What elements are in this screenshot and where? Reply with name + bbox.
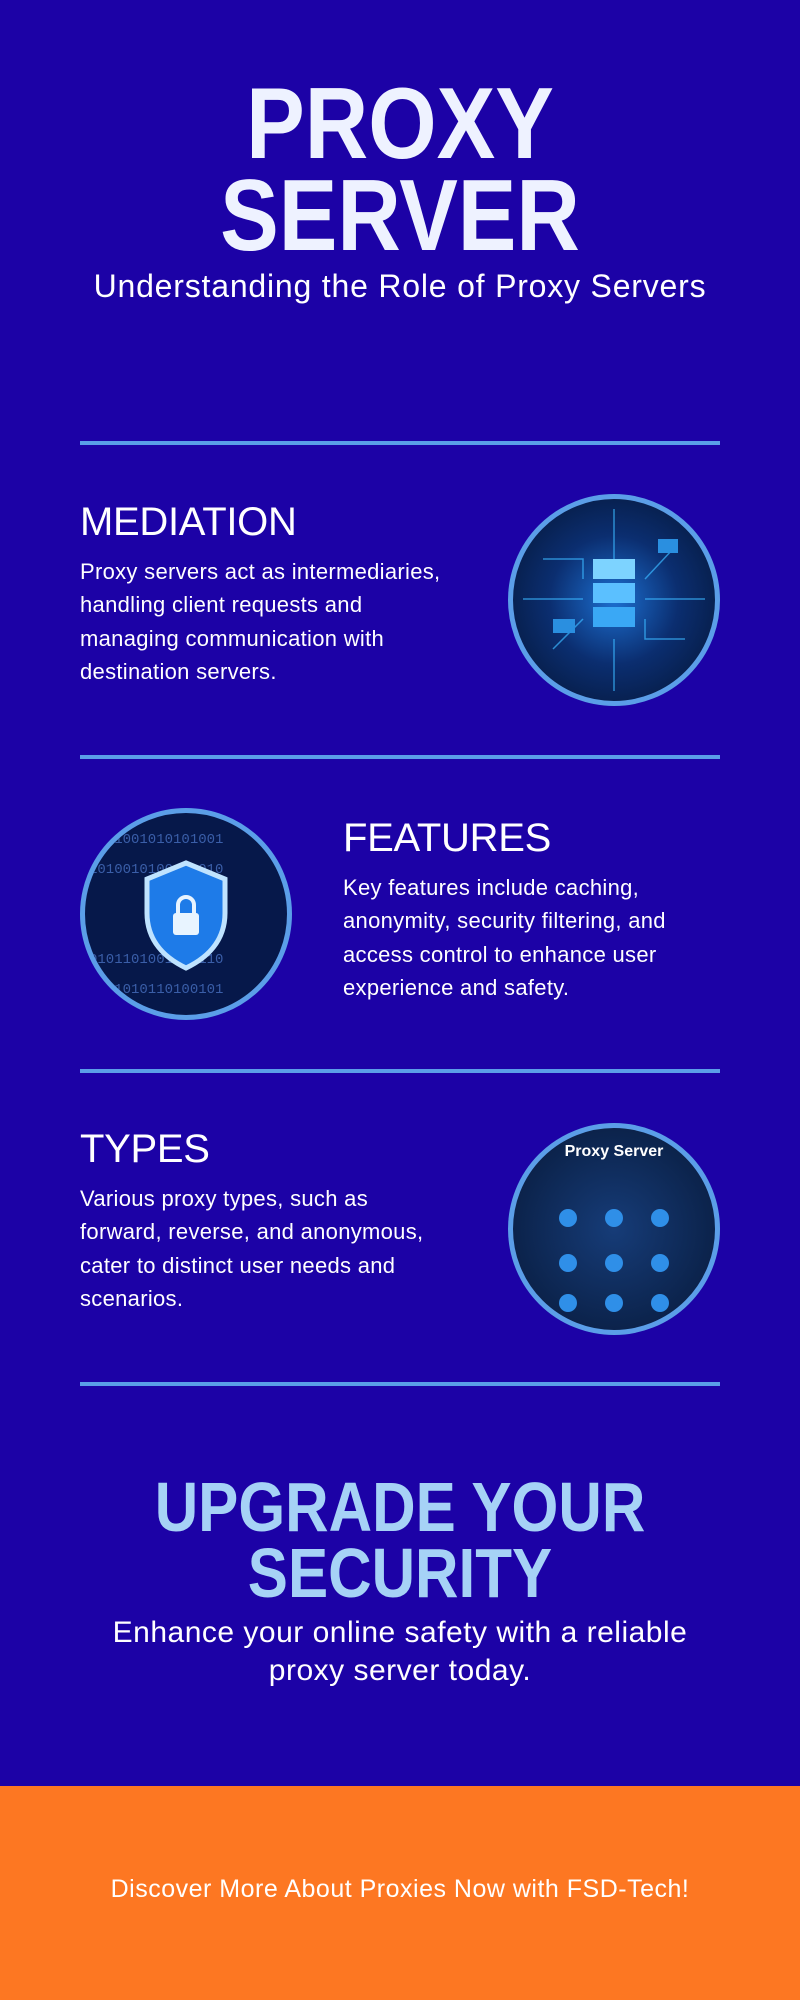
cta text: Enhance your online safety with a reliable	[113, 1616, 687, 1649]
icon: shield circle: 0101101001010110	[89, 952, 223, 968]
text: features: Key features include caching, anonymity, security filtering, and access control to enhance user experience and safety.	[343, 875, 666, 1000]
footer banner	[0, 1786, 800, 2000]
section: types	[80, 1127, 423, 1311]
text: mediation: Proxy servers act as intermediaries, handling client requests and managing communication with destination servers.	[80, 559, 440, 684]
icon: shield circle	[80, 808, 292, 1020]
cta heading: SECURITY	[248, 1534, 552, 1612]
icon: shield circle: 1010010100101010	[89, 862, 223, 878]
cta text	[113, 1616, 687, 1687]
cta text: proxy server today.	[269, 1654, 531, 1687]
text: types: Various proxy types, such as forward, reverse, and anonymous, cater to distinct user needs and scenarios.	[80, 1186, 423, 1311]
icon: proxy server diagram circle: Proxy Server	[565, 1143, 663, 1160]
title: PROXY	[246, 68, 554, 180]
section: features	[343, 816, 666, 1000]
title	[220, 68, 580, 272]
icon: proxy server diagram circle	[508, 1123, 720, 1335]
icon: shield circle: 0101001010101001	[89, 832, 223, 848]
cta heading	[155, 1468, 645, 1612]
subtitle: Understanding the Role of Proxy Servers	[94, 268, 706, 304]
cta heading: UPGRADE YOUR	[155, 1468, 645, 1546]
heading: features: FEATURES	[343, 816, 551, 860]
footer text: Discover More About Proxies Now with FSD-Tech!	[111, 1875, 689, 1903]
icon: server circle	[508, 494, 720, 706]
heading: mediation: MEDIATION	[80, 500, 297, 544]
icon: shield circle: 1001010110100101	[89, 982, 223, 998]
title: SERVER	[220, 160, 580, 272]
section: mediation	[80, 500, 440, 684]
heading: types: TYPES	[80, 1127, 210, 1171]
